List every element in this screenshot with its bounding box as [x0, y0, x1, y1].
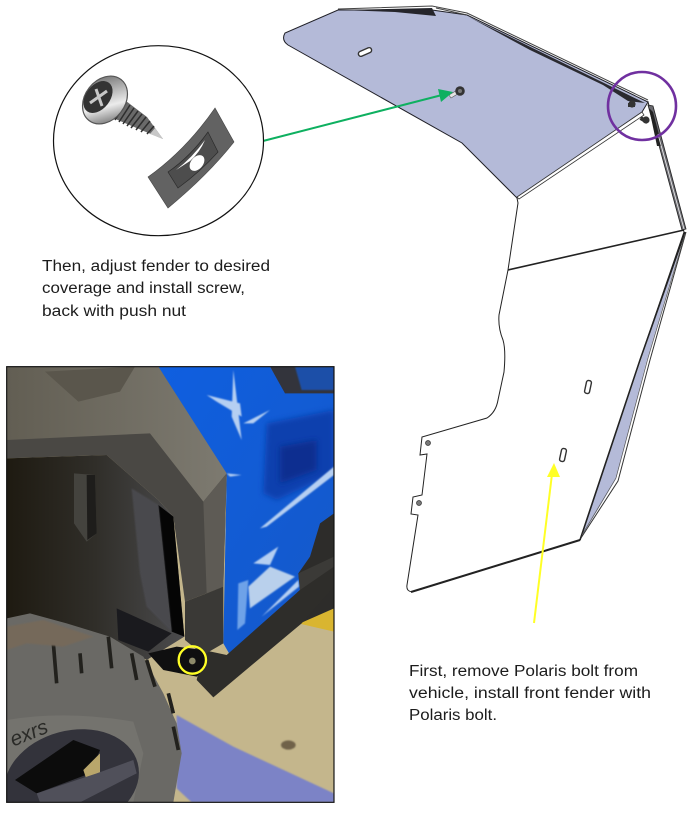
fastener	[189, 658, 196, 664]
slots	[358, 47, 592, 462]
bolt on panel	[449, 86, 465, 98]
photo of vehicle front fender	[0, 367, 334, 814]
text: step one instruction	[409, 663, 651, 724]
text: step one instruction: First, remove Polaris bolt from	[409, 663, 638, 680]
blue panel reflections	[207, 370, 334, 617]
embossed logo area	[45, 367, 135, 402]
yellow highlight circle	[179, 646, 206, 674]
corner bolts	[628, 100, 650, 124]
tire	[7, 613, 182, 802]
wheel rim	[7, 729, 139, 802]
upper fender flare	[7, 367, 227, 602]
icon: push nut	[148, 108, 234, 208]
purple highlight circle	[608, 72, 676, 140]
yellow arrow	[534, 463, 560, 623]
black slit	[158, 505, 184, 637]
tire sidewall lettering: exrs	[7, 715, 51, 751]
inner wheel well	[7, 455, 184, 660]
text: step two instruction: Then, adjust fender to desired	[42, 258, 270, 275]
fender line drawing	[284, 6, 686, 592]
dark right background	[298, 514, 334, 622]
floor stain	[281, 740, 296, 750]
yellow floor stripe	[301, 608, 334, 632]
green arrow	[263, 89, 453, 141]
text: step two instruction: coverage and install screw,	[42, 280, 245, 297]
tire tread grooves	[53, 637, 178, 750]
wall vertical recess	[74, 473, 97, 542]
flare lower corner	[185, 587, 223, 655]
blue mat	[177, 715, 334, 802]
text: step one instruction: Polaris bolt.	[409, 707, 497, 724]
bottom edge	[411, 540, 580, 592]
top shaded panel	[284, 10, 648, 198]
detail circle with hardware	[54, 46, 264, 236]
icon: screw	[73, 67, 163, 139]
text: step two instruction: back with push nut	[42, 303, 187, 320]
text: step two instruction	[42, 258, 270, 320]
fender body outline	[407, 102, 684, 592]
lower bracket	[117, 608, 172, 652]
text: step one instruction: vehicle, install front fender with	[409, 685, 651, 702]
mounting holes	[416, 440, 430, 506]
lower right shaded flange	[580, 232, 686, 540]
photo border	[7, 367, 334, 802]
blue panel shading	[263, 410, 334, 500]
upper right flange	[648, 105, 686, 230]
top flange	[338, 6, 648, 103]
background upper right	[270, 367, 334, 395]
cross fold line	[508, 230, 684, 270]
dark lower trim	[196, 590, 303, 698]
top panel lower flange	[517, 112, 644, 199]
blue body panel	[158, 367, 334, 655]
